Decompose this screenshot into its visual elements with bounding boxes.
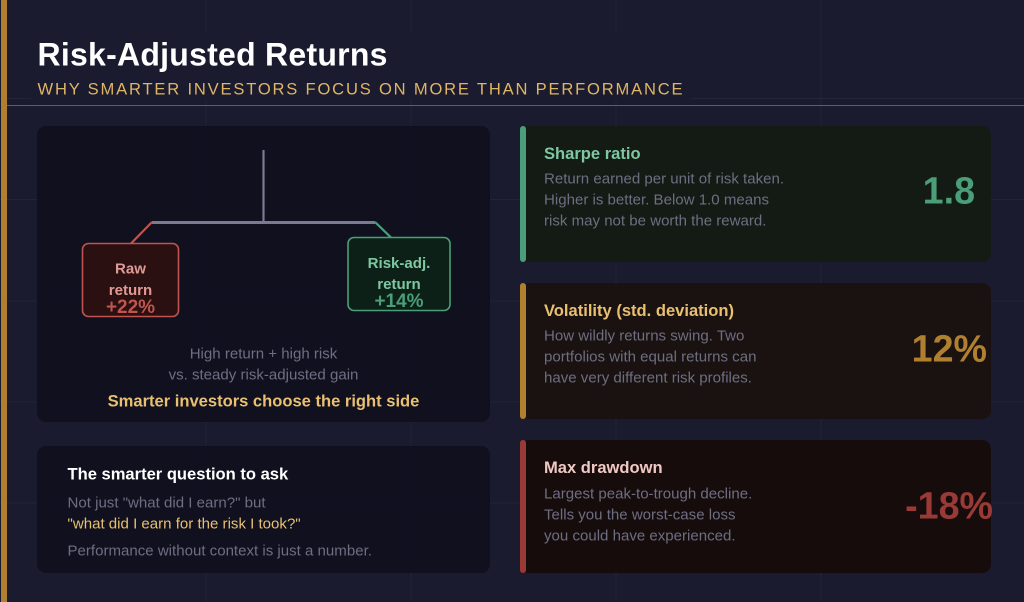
raw return box: +22%: [106, 297, 155, 318]
panel: volatility: portfolios with equal returns can: [544, 348, 756, 366]
panel: sharpe ratio: Higher is better. Below 1.0 means: [544, 192, 769, 208]
panel: the smarter question: [37, 446, 490, 573]
raw return box: return: [109, 282, 152, 299]
risk-adjusted return box: Risk-adj.: [368, 255, 430, 272]
panel: the smarter question: Not just "what did I earn?" but: [68, 494, 266, 511]
accent bar: [520, 126, 526, 262]
title: Risk-Adjusted Returns: [38, 36, 388, 72]
panel: volatility: have very different risk profiles.: [544, 370, 752, 386]
scale caption: [169, 346, 358, 384]
panel: the smarter question: Performance without context is just a number.: [68, 542, 372, 559]
panel: the smarter question: The smarter question to ask: [68, 464, 289, 483]
scale diagram: [82, 150, 450, 318]
panel: sharpe ratio: [520, 126, 991, 262]
panel: sharpe ratio: Sharpe ratio: [544, 144, 641, 163]
panel: max drawdown: you could have experienced.: [544, 528, 736, 544]
risk-adjusted return box: return: [377, 276, 421, 293]
panel: max drawdown: [520, 440, 993, 573]
panel: max drawdown: -18%: [905, 484, 993, 526]
risk-adjusted return box: +14%: [374, 291, 424, 312]
panel: balance scale comparison: [37, 126, 490, 422]
subtitle: WHY SMARTER INVESTORS FOCUS ON MORE THAN PERFORMANCE: [38, 79, 684, 98]
risk-adjusted return box: [348, 238, 450, 312]
header rule: [7, 105, 1024, 106]
panel: max drawdown: Tells you the worst-case loss: [544, 506, 736, 524]
accent bar: [520, 283, 526, 419]
panel: volatility: How wildly returns swing. Two: [544, 328, 744, 344]
scale caption: High return + high risk: [190, 346, 338, 363]
panel: max drawdown: Largest peak-to-trough decline.: [544, 486, 752, 502]
panel: volatility: 12%: [912, 328, 987, 370]
panel: volatility: [520, 283, 991, 419]
panel: the smarter question: "what did I earn for the risk I took?": [68, 515, 301, 532]
panel: sharpe ratio: risk may not be worth the reward.: [544, 212, 766, 230]
raw return box: Raw: [115, 261, 146, 278]
left accent bar: [1, 0, 7, 602]
raw return box: [82, 244, 178, 318]
accent bar: [520, 440, 526, 573]
panel: sharpe ratio: Return earned per unit of risk taken.: [544, 170, 784, 188]
panel: volatility: Volatility (std. deviation): [544, 301, 734, 320]
scale conclusion: Smarter investors choose the right side: [108, 391, 419, 410]
panel: sharpe ratio: 1.8: [923, 170, 975, 212]
scale caption: vs. steady risk-adjusted gain: [169, 367, 358, 384]
panel: max drawdown: Max drawdown: [544, 458, 663, 477]
